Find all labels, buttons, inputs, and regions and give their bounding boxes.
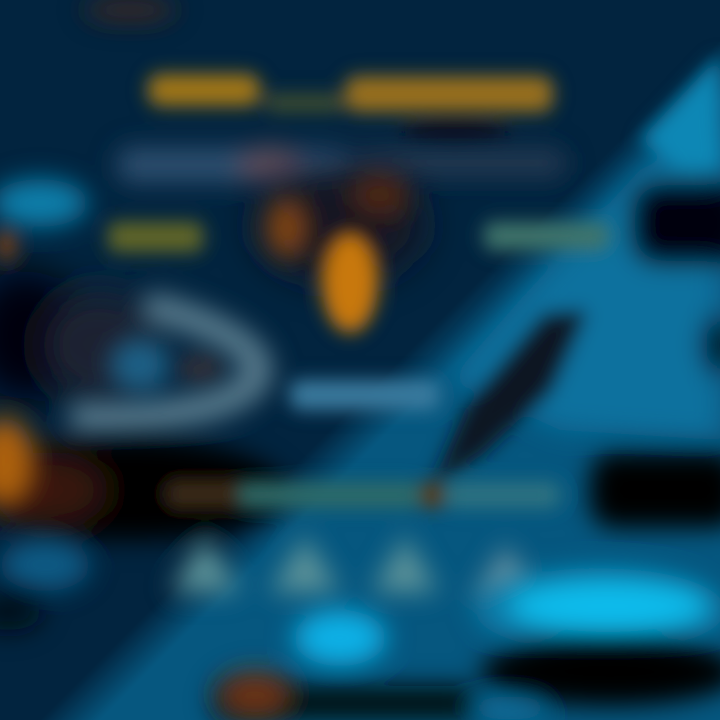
dark shadow under title: [400, 120, 510, 140]
right label: [484, 222, 609, 250]
right blue field: [450, 130, 720, 440]
icon: triangle 1: [170, 535, 240, 592]
right dark shapes: [590, 186, 720, 528]
left bottom blue patch: [0, 539, 90, 591]
title: [148, 74, 553, 112]
left bowl: [0, 229, 440, 540]
bottom right patch: [470, 696, 550, 720]
decorative top blob: [84, 0, 176, 20]
diagonal feather: [414, 312, 585, 508]
left label: [108, 222, 203, 252]
subtitle: [118, 145, 565, 185]
horizontal band: [165, 480, 560, 508]
top right light panel: [640, 55, 720, 170]
lower centre bowl: [215, 610, 475, 720]
icon: triangle 3: [372, 535, 438, 592]
icon: triangle 2: [270, 535, 340, 592]
icon: central flame: [255, 170, 425, 333]
row of triangle icons: [170, 535, 542, 600]
icon: triangle 4: [472, 545, 542, 600]
left teal blob: [0, 179, 88, 227]
lower right bowl: [475, 568, 720, 706]
dark lower left: [0, 594, 42, 630]
